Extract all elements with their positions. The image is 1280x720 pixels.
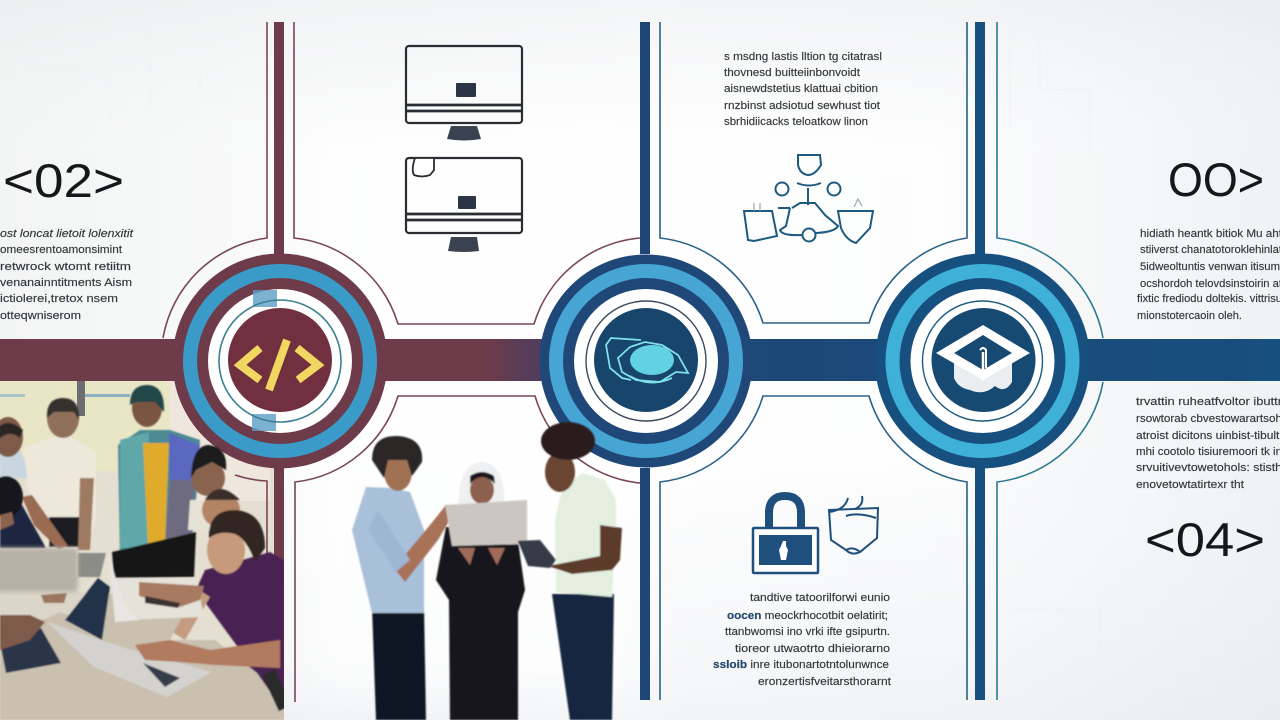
- background heads on right: [188, 445, 240, 530]
- text block: left: omeesrentoamonsimint: [0, 244, 122, 256]
- icon: cloud shape: [606, 338, 688, 383]
- hands at left: [0, 615, 45, 650]
- vertical bars: [274, 22, 985, 700]
- person: man in pale green shirt: [518, 422, 622, 720]
- text block: right upper: fixtic frediodu doltekis. vittrisu: [1137, 293, 1280, 305]
- tables: [0, 590, 290, 720]
- photo background: students at tables: [0, 381, 284, 720]
- text block: top centre: sbrhidiicacks teloatkow linon: [724, 116, 868, 128]
- icon: shield with sprouts: [829, 496, 878, 554]
- text block: top centre: aisnewdstetius klattuai cbition: [724, 83, 878, 95]
- text block: left: otteqwniserom: [0, 310, 81, 322]
- text block: bottom centre: ssloib inre itubonartotntolunwnce: [713, 659, 889, 671]
- person: woman in black abaya: [436, 462, 527, 720]
- text block: right upper: mionstotercaoin oleh.: [1137, 310, 1242, 322]
- text block: right lower: mhi cootolo tisiuremoori tk in: [1136, 446, 1280, 458]
- person at far left: [0, 416, 27, 480]
- text block: left: ictiolerei,tretox nsem: [0, 293, 118, 305]
- text block: right upper: 5idweoltuntis venwan itisum: [1140, 261, 1280, 273]
- text block: right lower: srvuitivevtowetohols: stisth: [1136, 462, 1280, 474]
- text block: left: venanainntitments Aism: [0, 277, 132, 289]
- text block: right lower: trvattin ruheatfvoltor ibuttr: [1136, 396, 1280, 408]
- node 3: education: [875, 254, 1090, 468]
- connector lines: [163, 22, 1103, 702]
- text block: right upper: [1137, 228, 1280, 322]
- icon: monitor top: [406, 46, 522, 140]
- text block: right lower: enovetowtatirtexr tht: [1136, 479, 1244, 491]
- laptop held: [445, 500, 527, 546]
- text block: right upper: stiiverst chanatotoroklehinlat: [1140, 244, 1280, 256]
- photo: students working on laptops: [0, 385, 292, 720]
- text block: right lower: [1136, 396, 1280, 491]
- node 2: cloud: [540, 254, 752, 468]
- text block: top centre: [724, 51, 882, 128]
- white laptop: [108, 553, 139, 622]
- dark keyboard: [0, 628, 61, 673]
- heading: 02: <02>: [3, 154, 124, 207]
- dark tablet: [65, 578, 110, 640]
- icon: graduation cap: [936, 325, 1030, 392]
- text block: left: ost loncat lietoit lolenxitit: [0, 228, 134, 240]
- text block: bottom centre: oocen meockrhocotbit oelatirit;: [727, 610, 888, 622]
- icon: padlock: [753, 496, 818, 573]
- text block: top centre: s msdng lastis lltion tg citatrasl: [724, 51, 882, 63]
- text block: bottom centre: tandtive tatoorilforwi eunio: [750, 592, 890, 604]
- horizontal timeline bar: [0, 339, 1280, 381]
- text block: right lower: atroist dicitons uinbist-tibulti: [1136, 430, 1280, 442]
- text block: bottom centre: tioreor utwaotrto dhieiorarno: [735, 643, 890, 655]
- hands on keyboard: [135, 640, 280, 668]
- text block: right lower: rsowtorab cbvestowarartsoh: [1136, 413, 1280, 425]
- text block: left: [0, 228, 134, 322]
- blurred laptop lid: [0, 548, 78, 592]
- black laptop: [112, 532, 196, 578]
- text block: bottom centre: [713, 592, 891, 688]
- icon: network: [744, 155, 873, 243]
- person in colourful scarf: [118, 385, 200, 560]
- person in white shirt: [24, 398, 96, 550]
- icon: monitor bottom: [406, 158, 522, 252]
- text block: left: retwrock wtomt retiitm: [0, 261, 131, 273]
- text block: right upper: ocshordoh telovdsinstoirin at: [1140, 278, 1280, 290]
- silver laptop: [47, 622, 212, 697]
- heading: 00: OO>: [1168, 153, 1264, 206]
- person in purple shirt: [172, 510, 284, 700]
- node 1: code: [172, 254, 388, 468]
- person leaning at far left: [0, 476, 68, 549]
- person: man in blue shirt: [352, 436, 452, 720]
- text block: top centre: thovnesd buitteiinbonvoidt: [724, 67, 860, 79]
- heading: 04: <04>: [1145, 513, 1265, 566]
- text block: top centre: rnzbinst adsiotud sewhust tiot: [724, 100, 880, 112]
- text block: bottom centre: ttanbwomsi ino vrki ifte gsipurtn.: [725, 626, 890, 638]
- icon: code brackets: [240, 340, 318, 390]
- text block: bottom centre: eronzertisfveitarsthorarnt: [758, 676, 891, 688]
- text block: right upper: hidiath heantk bitiok Mu aht: [1140, 228, 1280, 240]
